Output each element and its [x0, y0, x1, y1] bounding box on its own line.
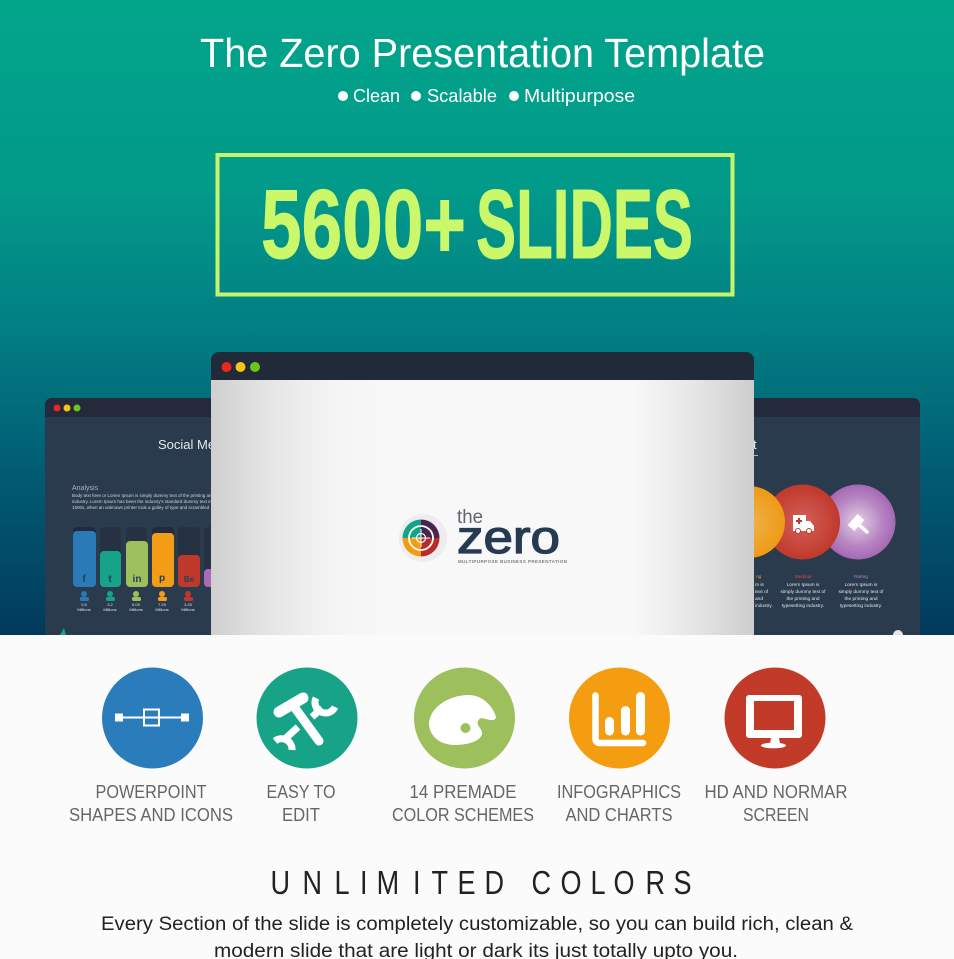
- bar chart: Millions: [129, 607, 143, 612]
- section description: [101, 914, 853, 959]
- column captions: ng: [756, 575, 762, 580]
- bar chart: Millions: [77, 607, 91, 612]
- circle: red ambulance: [765, 484, 840, 560]
- section heading: [271, 866, 692, 902]
- column captions: simply dummy text of: [780, 589, 826, 595]
- bar chart: t: [108, 574, 112, 585]
- column captions: [755, 574, 884, 609]
- lower panel background: [0, 635, 954, 959]
- subtitle: Scalable: [427, 85, 497, 106]
- left slide: social media: 1500s, when an unknown printer took a galley of type and scrambled: [72, 505, 210, 510]
- main slide window: [211, 352, 754, 635]
- left slide: social media: [45, 398, 233, 635]
- subtitle: Multipurpose: [524, 85, 635, 106]
- feature: infographics: [557, 668, 681, 825]
- feature: infographics: INFOGRAPHICS: [557, 781, 681, 802]
- column captions: the printing and: [844, 596, 878, 602]
- left slide: social media: Analysis: [72, 485, 99, 492]
- column captions: text of: [755, 589, 769, 595]
- bar chart: 6.05: [132, 602, 141, 607]
- feature: infographics: AND CHARTS: [566, 804, 672, 825]
- headline box: 5600+: [261, 169, 466, 279]
- headline box: SLIDES: [476, 169, 693, 279]
- bar chart: f: [82, 574, 86, 585]
- bar chart: 0.5: [81, 602, 88, 607]
- subtitle: Clean: [353, 85, 400, 106]
- column captions: m is: [755, 582, 764, 588]
- feature: powerpoint shapes: POWERPOINT: [96, 781, 206, 802]
- circle: purple gavel: [820, 484, 896, 560]
- bar chart: [73, 527, 230, 612]
- column captions: simply dummy text of: [838, 589, 884, 595]
- feature: color schemes: 14 PREMADE: [410, 781, 516, 802]
- feature: powerpoint shapes: [69, 668, 233, 825]
- feature: screen: SCREEN: [743, 804, 809, 825]
- logo: the zero: zero: [457, 511, 560, 563]
- feature: powerpoint shapes: SHAPES AND ICONS: [69, 804, 233, 825]
- right slide: circles: [713, 398, 920, 640]
- feature: easy to edit: [256, 668, 358, 825]
- feature: easy to edit: EASY TO: [266, 781, 336, 802]
- bar chart: Be: [184, 575, 195, 584]
- hero background: [0, 0, 954, 635]
- feature: easy to edit: EDIT: [282, 804, 320, 825]
- column captions: the printing and: [786, 596, 820, 602]
- headline box: [218, 155, 732, 294]
- left slide: social media: Social Media: [158, 437, 233, 452]
- bar chart: Millions: [155, 607, 169, 612]
- feature: color schemes: [392, 668, 534, 825]
- section heading: COLORS: [532, 866, 692, 902]
- bar chart: p: [159, 573, 165, 584]
- logo: the zero: MULTIPURPOSE BUSINESS PRESENTATION: [458, 559, 567, 564]
- section heading: UNLIMITED: [271, 866, 504, 902]
- bar chart: Millions: [181, 607, 195, 612]
- column captions: Lorem Ipsum is: [787, 582, 820, 588]
- logo: the zero: the: [457, 507, 483, 528]
- column captions: Rating: [854, 574, 868, 580]
- bar chart: Millions: [103, 607, 117, 612]
- circle: orange: [713, 486, 785, 558]
- bar chart: 3.2: [107, 602, 114, 607]
- column captions: Medical: [795, 574, 811, 580]
- title: The Zero Presentation Template: [200, 30, 765, 76]
- feature: screen: [704, 668, 848, 825]
- column captions: typesetting industry.: [782, 603, 824, 609]
- bar chart: 7.25: [158, 602, 167, 607]
- feature: screen: HD AND NORMAR: [704, 781, 848, 802]
- logo: the zero: [399, 507, 567, 564]
- column captions: typesetting industry.: [840, 603, 882, 609]
- bar chart: 3.25: [184, 602, 193, 607]
- section description: Every Section of the slide is completely customizable, so you can build rich, clean &: [101, 914, 853, 935]
- column captions: Lorem Ipsum is: [845, 582, 878, 588]
- subtitle: [338, 85, 635, 106]
- feature: color schemes: COLOR SCHEMES: [392, 804, 534, 825]
- bar chart: in: [133, 574, 141, 585]
- left slide: social media: industry. Lorem Ipsum has been the industry's standard dummy text ever: [72, 499, 217, 504]
- column captions: and: [755, 596, 763, 602]
- left slide: social media: Body text here or Lorem Ipsum is simply dummy text of the printing and: [72, 493, 215, 498]
- right slide: circles: t: [753, 437, 757, 452]
- column captions: industry.: [755, 603, 773, 609]
